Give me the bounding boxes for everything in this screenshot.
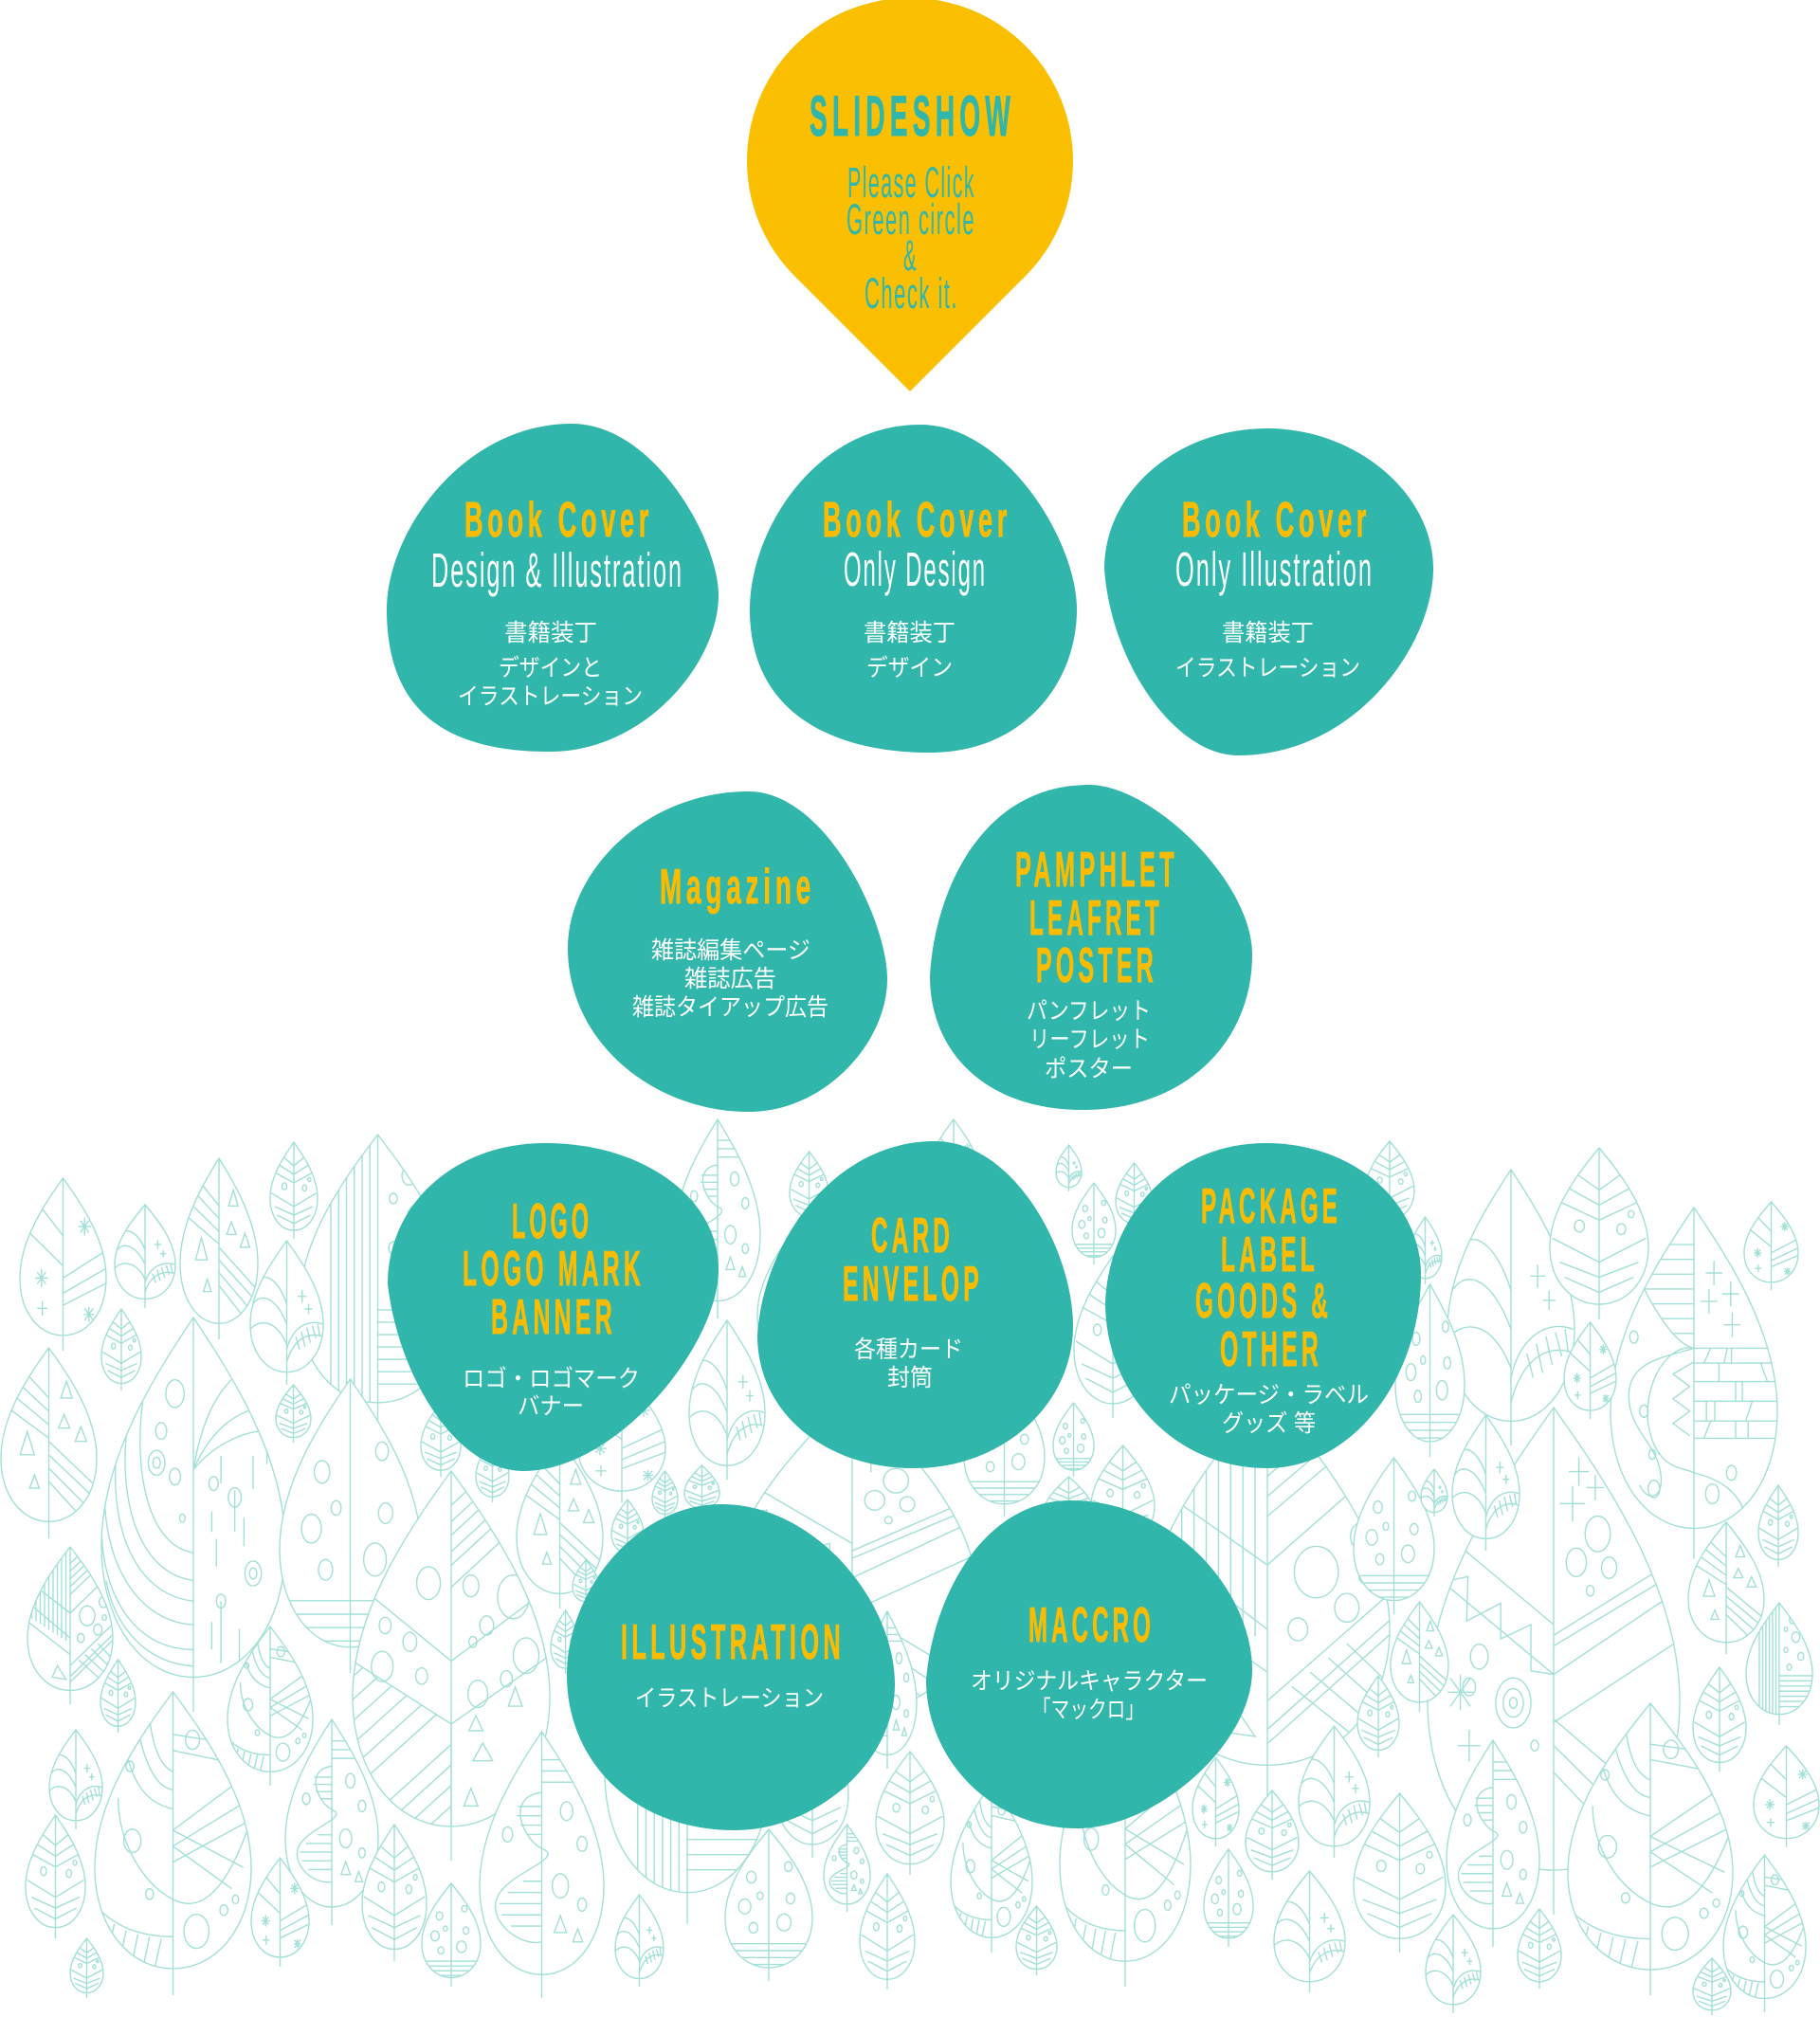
japanese description: リーフレット xyxy=(1029,1027,1150,1053)
japanese description: バナー xyxy=(518,1393,584,1420)
japanese description xyxy=(463,1366,640,1420)
heading xyxy=(463,1194,645,1345)
heading: Book Cover xyxy=(464,493,653,548)
heading: LEAFRET xyxy=(1029,891,1163,946)
callout: yellow slideshow pin xyxy=(747,0,1073,391)
japanese description: ロゴ・ロゴマーク xyxy=(463,1366,640,1392)
heading: Book Cover xyxy=(823,493,1011,548)
panel: Pamphlet Leafret Poster xyxy=(930,785,1252,1110)
panel: Logo xyxy=(388,1143,719,1471)
heading: POSTER xyxy=(1036,938,1157,993)
japanese description xyxy=(971,1668,1208,1723)
japanese description: 封筒 xyxy=(887,1365,933,1391)
japanese description: イラストレーション xyxy=(635,1685,824,1712)
panel: Book Cover Design & Illustration: Design & Illustration xyxy=(431,543,683,597)
japanese description: イラストレーション xyxy=(458,683,643,710)
blob xyxy=(568,791,887,1112)
callout: yellow slideshow pin: SLIDESHOW xyxy=(810,84,1015,148)
heading: LABEL xyxy=(1221,1227,1319,1282)
japanese description xyxy=(458,620,643,710)
japanese description: 雑誌広告 xyxy=(684,966,776,992)
japanese description: 書籍装丁 xyxy=(504,620,597,646)
leaves: largest background layer xyxy=(300,1119,1777,1987)
japanese description xyxy=(632,937,828,1021)
japanese description: デザインと xyxy=(499,655,602,681)
heading: CARD xyxy=(871,1208,954,1263)
japanese description: オリジナルキャラクター xyxy=(971,1668,1208,1695)
panel: Card Envelop xyxy=(757,1141,1073,1468)
japanese description: ポスター xyxy=(1045,1056,1133,1082)
panel: Card Envelop: ENVELOP xyxy=(843,1257,983,1312)
blob xyxy=(387,424,719,752)
panel: Package Label Goods xyxy=(1105,1143,1421,1468)
pin shape xyxy=(747,0,1073,391)
blob xyxy=(750,425,1077,753)
heading: Book Cover xyxy=(1182,493,1371,548)
japanese description: グッズ 等 xyxy=(1222,1410,1316,1437)
leaves: large layer xyxy=(95,1119,1733,1998)
heading xyxy=(843,1208,983,1312)
panel: Package Label Goods: GOODS & xyxy=(1195,1274,1332,1329)
heading: BANNER xyxy=(491,1290,616,1345)
text block: instructions: & xyxy=(903,231,918,280)
blob xyxy=(388,1143,719,1471)
japanese description xyxy=(1169,1382,1369,1437)
heading: Magazine xyxy=(660,860,815,915)
japanese description: パンフレット xyxy=(1027,998,1151,1025)
japanese description: パッケージ・ラベル xyxy=(1169,1382,1369,1408)
panel: Book Cover Only Illustration: Only Illustration xyxy=(1175,542,1374,596)
panel: Book Cover Design & Illustration xyxy=(387,424,719,752)
heading: OTHER xyxy=(1220,1322,1322,1377)
heading: LOGO xyxy=(512,1194,592,1249)
japanese description: イラストレーション xyxy=(1175,655,1360,681)
text block: instructions: Check it. xyxy=(864,269,958,318)
callout: yellow slideshow pin: Please Click xyxy=(847,158,975,207)
japanese description xyxy=(854,1336,963,1391)
japanese description xyxy=(1027,998,1151,1082)
japanese description: 書籍装丁 xyxy=(864,620,956,646)
japanese description: 書籍装丁 xyxy=(1222,620,1314,646)
japanese description xyxy=(864,620,956,681)
panel: Logo: LOGO MARK xyxy=(463,1242,645,1297)
blob xyxy=(930,785,1252,1110)
japanese description: 「マックロ」 xyxy=(1032,1697,1144,1723)
heading xyxy=(1015,843,1178,993)
panel: Illustration xyxy=(567,1504,895,1830)
blob xyxy=(926,1500,1252,1828)
blob xyxy=(1104,428,1433,755)
blob xyxy=(757,1141,1073,1468)
japanese description: 雑誌編集ページ xyxy=(651,937,810,964)
panel: Book Cover Only Design xyxy=(750,425,1077,753)
japanese description: 雑誌タイアップ広告 xyxy=(632,994,828,1021)
panel: Book Cover Only Design: Only Design xyxy=(844,542,987,596)
background: leaf forest illustration xyxy=(1,1119,1820,2015)
panel: Book Cover Only Illustration xyxy=(1104,428,1433,755)
panel: Maccro: MACCRO xyxy=(1028,1598,1155,1653)
callout: yellow slideshow pin: Green circle xyxy=(846,195,975,244)
japanese description xyxy=(1175,620,1360,681)
heading xyxy=(1195,1179,1341,1377)
panel: Illustration: ILLUSTRATION xyxy=(621,1615,845,1670)
blob xyxy=(567,1504,895,1830)
panel: Magazine xyxy=(568,791,887,1112)
japanese description: 各種カード xyxy=(854,1336,963,1363)
panel: Maccro xyxy=(926,1500,1252,1828)
leaves: small layer xyxy=(1,1141,1820,2015)
blob xyxy=(1105,1143,1421,1468)
panel: Pamphlet Leafret Poster: PAMPHLET xyxy=(1015,843,1178,898)
panel: Package Label Goods: PACKAGE xyxy=(1201,1179,1341,1234)
text block: instructions xyxy=(846,158,975,318)
japanese description: デザイン xyxy=(866,655,953,681)
